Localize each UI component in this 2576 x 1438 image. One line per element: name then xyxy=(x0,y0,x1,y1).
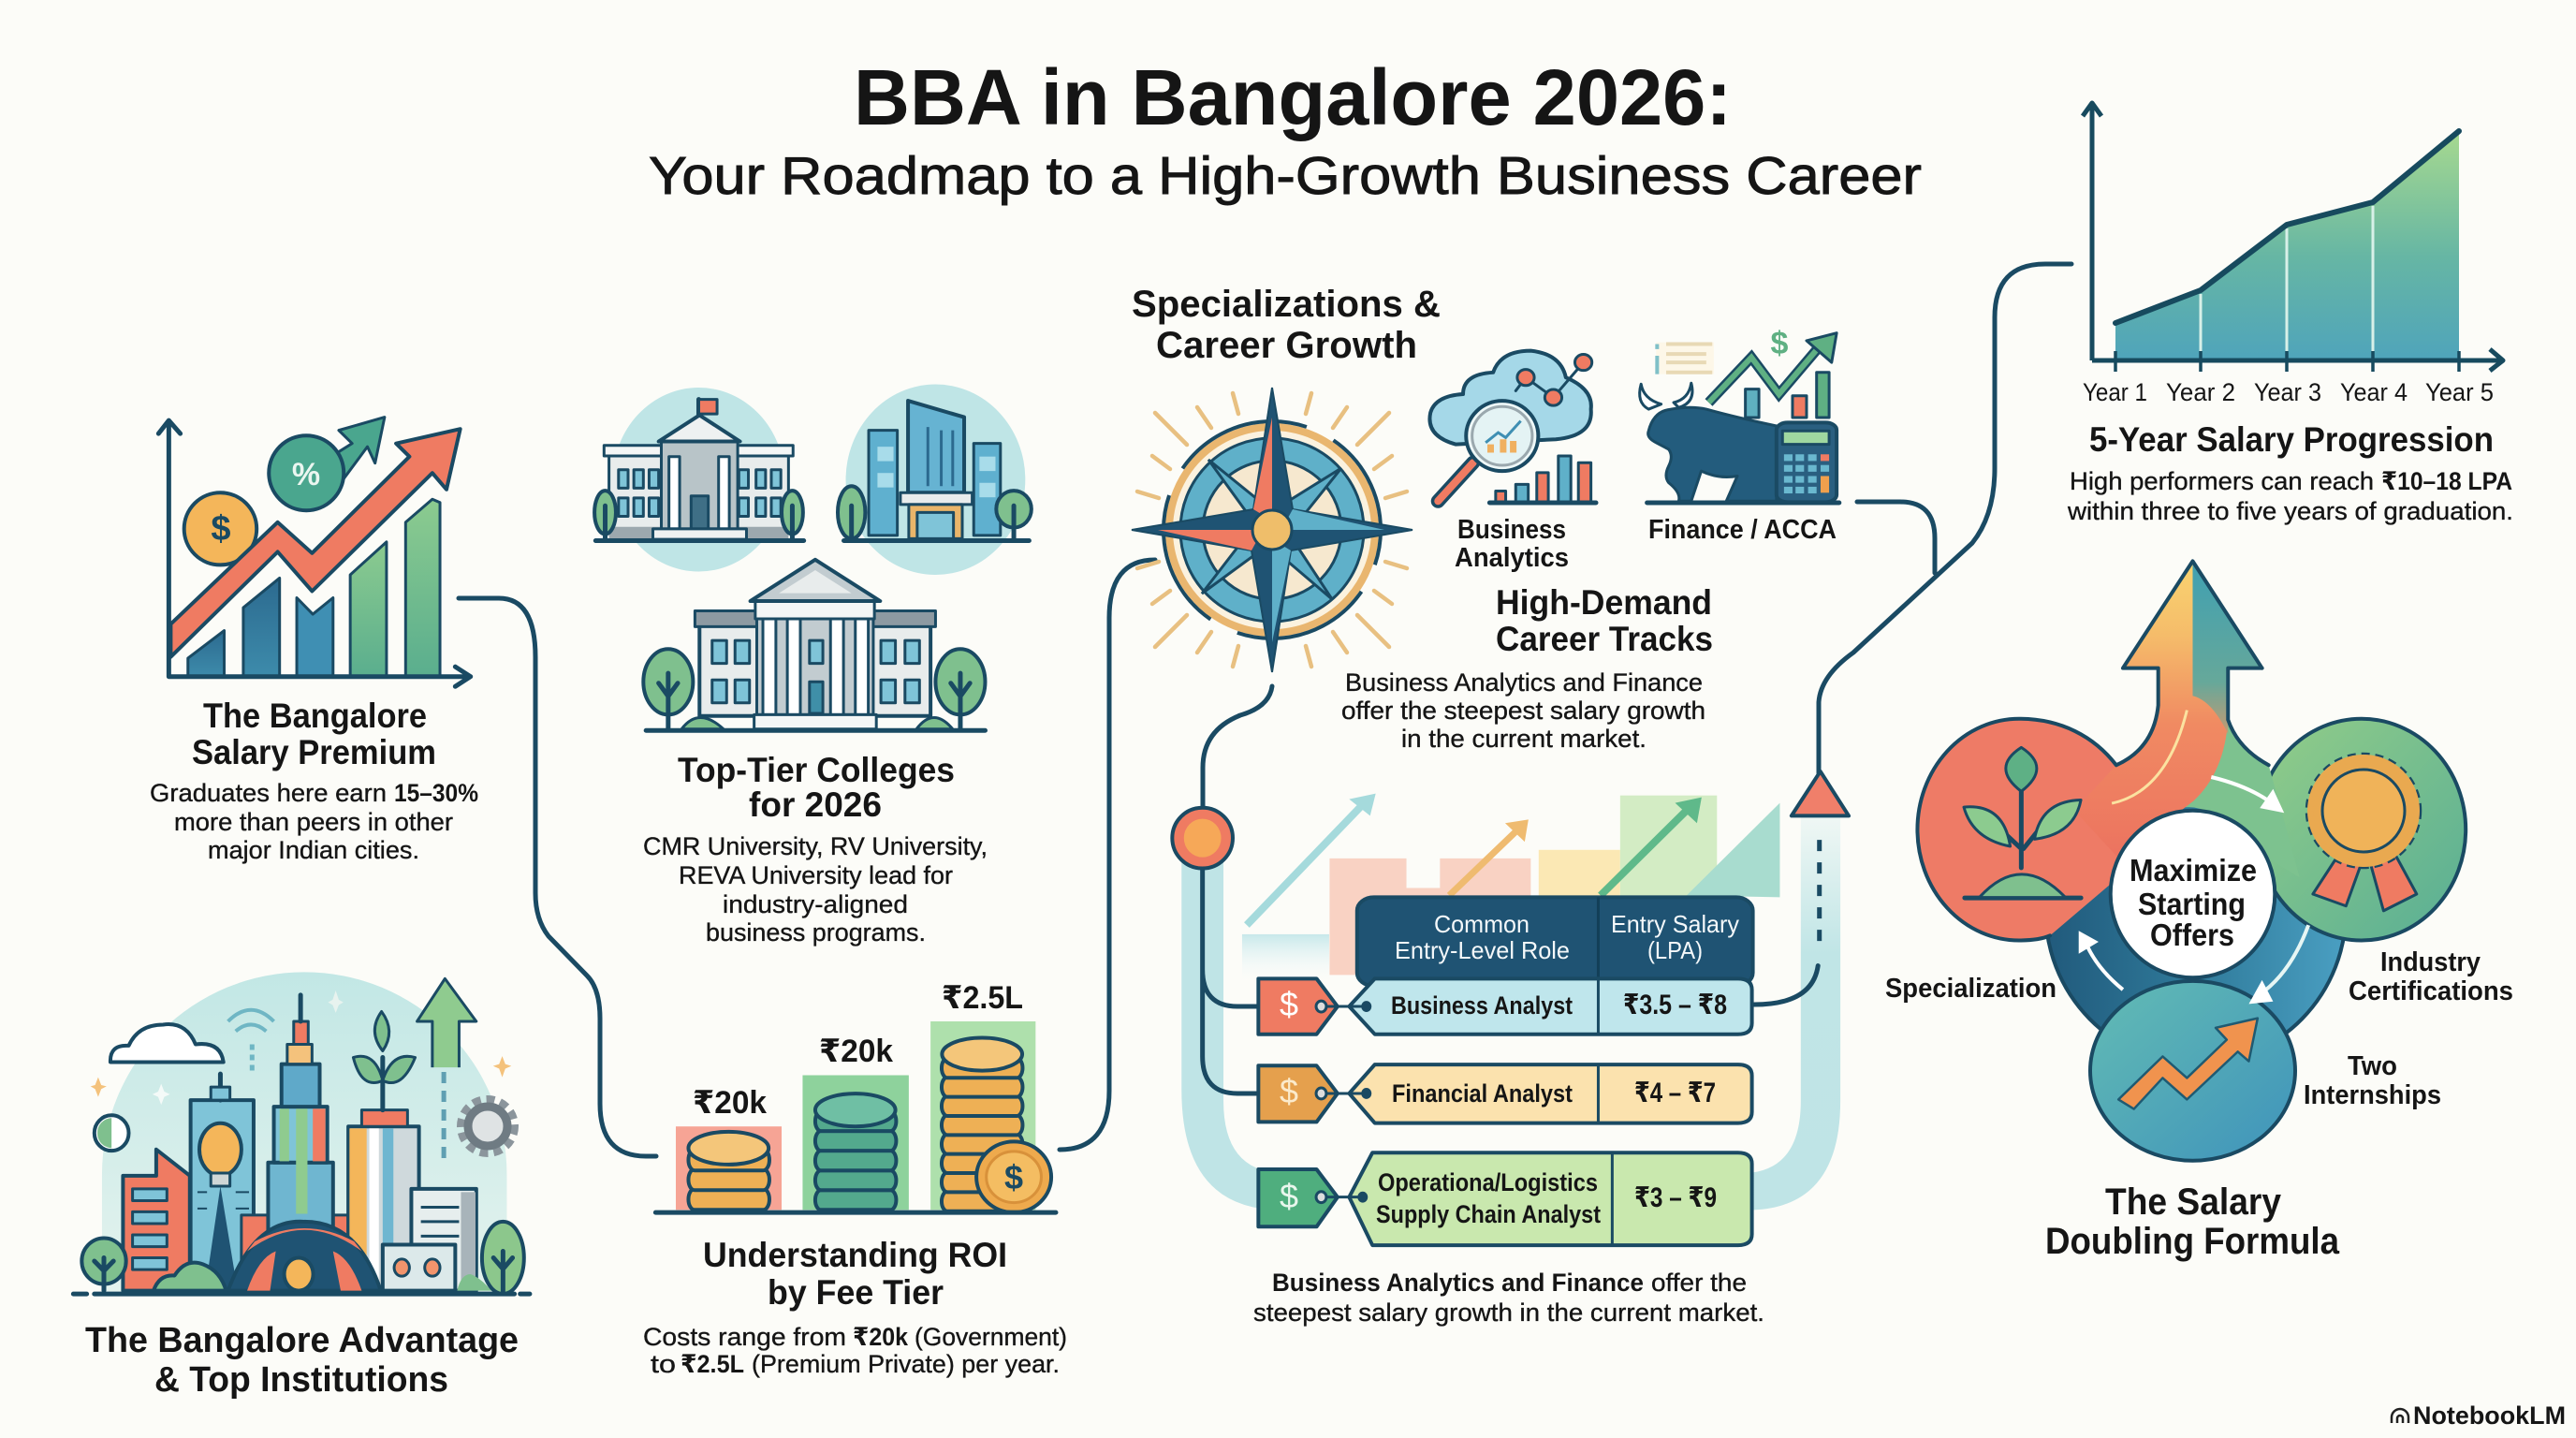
body text: in the current market. xyxy=(1401,725,1647,753)
tag dollar glyphs xyxy=(1280,985,1298,1215)
value labels: ₹20k xyxy=(819,1034,893,1069)
table header: Common xyxy=(1434,910,1530,938)
body text: offer the steepest salary growth xyxy=(1341,697,1705,725)
body text: Graduates here earn xyxy=(150,779,387,807)
axis labels: Year 1 xyxy=(2083,378,2147,406)
table row: financial analyst: Financial Analyst xyxy=(1392,1079,1573,1108)
heading: Understanding ROI xyxy=(703,1236,1007,1274)
body text: High performers can reach xyxy=(2070,467,2374,495)
heading: Top-Tier Colleges xyxy=(678,751,955,789)
footer text xyxy=(1253,1269,1764,1327)
connector: tracks to triangle line xyxy=(1857,502,1935,573)
label: internships: Internships xyxy=(2304,1080,2441,1110)
icon: rising salary chart xyxy=(158,418,471,686)
chart: area chart xyxy=(2083,103,2503,372)
panel: 5-year salary progression xyxy=(2067,103,2513,525)
connector: fee tier to compass xyxy=(1060,560,1155,1150)
label: finance: Finance / ACCA xyxy=(1648,515,1837,545)
tag dollar glyphs: $ xyxy=(1280,1072,1298,1110)
axis labels xyxy=(2083,378,2494,406)
table row: operations: Operationa/Logistics xyxy=(1378,1168,1598,1196)
label: business analytics xyxy=(1455,515,1569,573)
body text: (Government) xyxy=(915,1323,1067,1351)
diagram: three-lobe cycle with arrow xyxy=(1917,561,2466,1161)
body text: REVA University lead for xyxy=(679,861,953,889)
heading: & Top Institutions xyxy=(154,1360,448,1400)
heading: by Fee Tier xyxy=(768,1273,944,1312)
body text: ₹20k xyxy=(853,1323,909,1351)
panel: Bangalore advantage xyxy=(73,972,530,1400)
connector: salary premium to fee tier xyxy=(459,598,656,1156)
table header: Entry Salary xyxy=(1611,910,1739,938)
heading: Specializations & xyxy=(1132,284,1441,325)
heading xyxy=(1132,284,1441,366)
icon: business analytics xyxy=(1429,351,1596,503)
icon glyph: percent: % xyxy=(292,457,320,492)
icon glyph: green dollar: $ xyxy=(1771,326,1789,361)
body text xyxy=(643,832,988,946)
label: certifications xyxy=(2349,947,2513,1006)
table header: (LPA) xyxy=(1647,936,1703,964)
connector: compass to salary table xyxy=(1203,686,1272,809)
body text: major Indian cities. xyxy=(208,836,419,864)
center label xyxy=(2130,853,2257,952)
icon: gear xyxy=(461,1099,515,1153)
center label: Maximize xyxy=(2130,853,2257,888)
watermark: NotebookLM: NotebookLM xyxy=(2413,1401,2566,1430)
table row: operations xyxy=(1376,1168,1717,1228)
heading: career tracks: Career Tracks xyxy=(1496,620,1713,658)
table header: Entry-Level Role xyxy=(1395,936,1570,964)
heading: for 2026 xyxy=(749,785,882,824)
body text: industry-aligned xyxy=(723,890,908,918)
heading: The Salary xyxy=(2105,1181,2282,1223)
body text: business programs. xyxy=(706,918,926,946)
label: certifications: Industry xyxy=(2380,947,2481,977)
footer text: steepest salary growth in the current market. xyxy=(1253,1299,1764,1327)
table row: business analyst: Business Analyst xyxy=(1391,991,1573,1020)
body text xyxy=(643,1323,1067,1378)
table row: business analyst xyxy=(1391,990,1727,1020)
body text: (Premium Private) per year. xyxy=(752,1350,1060,1378)
heading: The Bangalore Advantage xyxy=(85,1321,519,1360)
body text: within three to five years of graduation. xyxy=(2067,497,2513,525)
subtitle: Your Roadmap to a High-Growth Business Career xyxy=(649,146,1922,206)
panel: salary doubling formula xyxy=(1885,561,2513,1262)
icon: finance bull and calculator xyxy=(1640,333,1839,503)
body text: ₹10–18 LPA xyxy=(2381,467,2512,495)
value labels: ₹20k xyxy=(693,1085,767,1121)
label: certifications: Certifications xyxy=(2349,976,2513,1006)
coin dollar glyph: $ xyxy=(1004,1158,1023,1196)
panel: specializations and career growth xyxy=(1132,284,1839,753)
table row: operations: Supply Chain Analyst xyxy=(1376,1200,1601,1228)
label: business analytics: Business xyxy=(1457,515,1566,545)
body text: to xyxy=(651,1350,676,1378)
body text: Business Analytics and Finance xyxy=(1345,668,1703,697)
body text: 15–30% xyxy=(394,779,478,807)
chart: coin stacks by fee tier xyxy=(655,1021,1056,1212)
body text: ₹2.5L xyxy=(681,1350,744,1378)
heading: career tracks: High-Demand xyxy=(1496,583,1712,622)
table row: financial analyst xyxy=(1392,1078,1716,1108)
heading: Doubling Formula xyxy=(2045,1221,2340,1262)
heading xyxy=(85,1321,519,1400)
icon: colleges illustration xyxy=(594,385,1032,730)
axis labels: Year 2 xyxy=(2166,378,2235,406)
body text xyxy=(150,779,478,864)
heading xyxy=(703,1236,1007,1312)
axis labels: Year 5 xyxy=(2425,378,2494,406)
body text: Costs range from xyxy=(643,1323,846,1351)
table row: financial analyst: ₹4 – ₹7 xyxy=(1634,1078,1716,1108)
value labels xyxy=(693,980,1023,1121)
icon: compass xyxy=(1132,388,1412,672)
panel: ROI by fee tier xyxy=(643,980,1067,1378)
heading: career tracks xyxy=(1496,583,1713,658)
heading: Career Growth xyxy=(1156,325,1417,366)
value labels: ₹2.5L xyxy=(942,980,1023,1016)
title block xyxy=(649,53,1922,206)
body text: CMR University, RV University, xyxy=(643,832,988,860)
heading xyxy=(678,751,955,824)
table header xyxy=(1395,910,1739,964)
icon glyph: dollar coin: $ xyxy=(211,509,231,549)
body text xyxy=(2067,467,2513,525)
center label: Offers xyxy=(2150,917,2234,952)
body text xyxy=(1341,668,1705,753)
connector: table to salary chart xyxy=(1819,264,2071,773)
heading: 5-Year Salary Progression xyxy=(2089,420,2494,459)
footer text: offer the xyxy=(1651,1269,1747,1297)
footer text: Business Analytics and Finance xyxy=(1272,1269,1644,1297)
heading: Salary Premium xyxy=(192,733,436,771)
tag dollar glyphs: $ xyxy=(1280,1177,1298,1215)
icon: city skyline xyxy=(73,972,530,1294)
label: internships xyxy=(2304,1051,2441,1110)
body text: more than peers in other xyxy=(174,808,453,836)
panel: Bangalore salary premium xyxy=(150,418,478,864)
table row: operations: ₹3 – ₹9 xyxy=(1634,1182,1717,1213)
center label: Starting xyxy=(2138,887,2246,921)
heading xyxy=(2045,1181,2340,1262)
axis labels: Year 4 xyxy=(2340,378,2408,406)
heading xyxy=(192,697,436,771)
icon: certification medal xyxy=(2306,754,2421,868)
table row: business analyst: ₹3.5 – ₹8 xyxy=(1623,990,1727,1020)
label: specialization: Specialization xyxy=(1885,974,2056,1004)
main title: BBA in Bangalore 2026: xyxy=(854,53,1732,141)
label: internships: Two xyxy=(2348,1051,2397,1081)
axis labels: Year 3 xyxy=(2254,378,2321,406)
tag dollar glyphs: $ xyxy=(1280,985,1298,1023)
panel: salary table xyxy=(1172,771,1849,1327)
backdrop: growth bars and path band xyxy=(1181,794,1840,1211)
heading: The Bangalore xyxy=(203,697,427,735)
panel: top-tier colleges xyxy=(594,385,1032,946)
label: business analytics: Analytics xyxy=(1455,543,1569,573)
connectors and tags xyxy=(1172,771,1849,1245)
